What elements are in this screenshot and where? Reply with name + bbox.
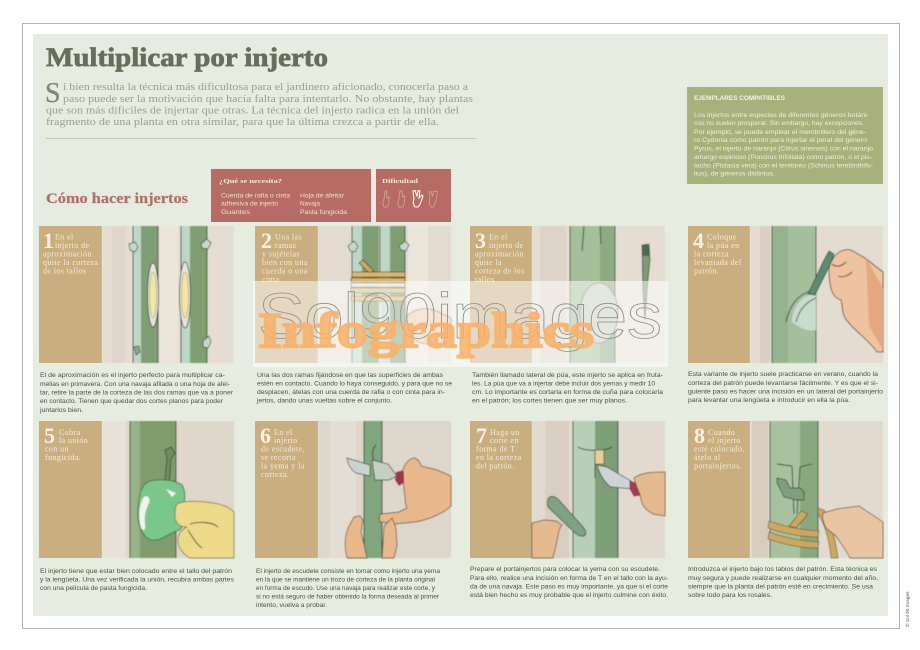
- description 3: en el patrón; los cortes tienen que ser muy planos.: [472, 398, 627, 404]
- caption 4: Coloque: [707, 232, 737, 242]
- caption 8: esté colocado,: [694, 444, 745, 454]
- caption 8: portainjertos.: [694, 462, 742, 470]
- caption 4: la corteza: [694, 250, 729, 258]
- description 2: desplacen, átelas con una cuerda de rafia o con cinta para in-: [257, 389, 445, 396]
- panel: difficulty: Dificultad: [382, 178, 418, 185]
- illustration 5: fungicide on graft: [102, 421, 234, 558]
- intro text block: que son más difíciles de injertar que otras. La técnica del injerto radica en la unión del: [46, 106, 459, 116]
- caption 8: [694, 423, 745, 470]
- title: Multiplicar por injerto: [46, 43, 328, 72]
- step 4 panel: [688, 226, 884, 404]
- panel: compatible specimens: [687, 87, 883, 184]
- credit: © Sol 90 Images: [904, 591, 911, 627]
- description 3: [472, 372, 664, 404]
- step 1 panel: [39, 226, 234, 414]
- intro text block: fragmento de una planta en otra similar, para que la última crezca a partir de ella.: [46, 117, 439, 128]
- description 6: en la que se mantiene un trozo de corteza de la planta original: [256, 576, 435, 584]
- panel: materials needed: [211, 169, 371, 222]
- description 8: Introduzca el injerto bajo los labios del patrón. Esta técnica es: [688, 566, 877, 573]
- caption 6: la yema y la: [261, 462, 305, 470]
- caption 6: injerto: [274, 436, 298, 445]
- description 3: cm. Lo importante es cortarla en forma de cuña para colocarla: [472, 389, 664, 396]
- panel: materials needed: adhesiva de injerto: [221, 200, 279, 208]
- caption 2: Una las: [275, 232, 302, 242]
- caption 3: [475, 228, 525, 284]
- caption 5: Cubra: [59, 428, 81, 437]
- watermark: orange text: Infographics: [258, 302, 594, 358]
- description 8: muy segura y puede realizarse en cualquier momento del año,: [688, 575, 878, 582]
- caption 7: forma de T: [476, 444, 515, 454]
- caption 8: el injerto: [708, 436, 741, 445]
- step 5 panel: [39, 421, 234, 592]
- caption 1: quite la corteza: [43, 258, 98, 267]
- panel: materials needed: ¿Qué se necesita?: [219, 178, 282, 185]
- description 6: [256, 568, 441, 609]
- description 2: [256, 372, 453, 404]
- watermark band: [253, 280, 668, 367]
- caption 8: 8: [694, 423, 705, 448]
- description 6: intento, vuelva a probar.: [256, 602, 327, 609]
- description 4: Esta variante de injerto suele practicarse en verano, cuando la: [688, 371, 879, 378]
- caption 5: [44, 423, 88, 462]
- panel: materials needed: Cuerda de rafia o cinta: [221, 192, 291, 200]
- caption 4: 4: [693, 228, 704, 253]
- description 1: melias en primavera. Con una navaja afilada o una hoja de afei-: [40, 381, 230, 388]
- description 2: Una las dos ramas fijándose en que las superficies de ambas: [257, 372, 443, 379]
- caption 4: patrón.: [694, 266, 719, 276]
- description 1: El de aproximación es el injerto perfecto para multiplicar ca-: [40, 372, 225, 379]
- caption 4: la púa en: [707, 241, 739, 250]
- caption 7: [476, 423, 522, 470]
- panel: materials needed: Hoja de afeitar: [300, 192, 344, 200]
- description 7: [470, 566, 669, 599]
- description 7: Para ello, realice una incisión en forma de T en el tallo con la ayu-: [470, 575, 668, 582]
- panel: difficulty: [376, 169, 451, 222]
- caption 2: [261, 228, 308, 284]
- illustration 6: cutting the bud: [318, 421, 451, 558]
- description 2: estén en contacto. Cuando lo haya conseguido, y para que no se: [257, 380, 453, 388]
- caption 1: de los tallos: [43, 266, 86, 276]
- caption 1: 1: [43, 228, 54, 253]
- description 1: en contacto. Tienen que quedar dos cortes planos para poder: [40, 398, 223, 405]
- caption 1: injerto de: [55, 241, 89, 250]
- panel: compatible specimens: Los injertos entre especies de diferentes géneros botáni-: [694, 112, 869, 119]
- caption 7: en la corteza: [476, 453, 522, 462]
- description 8: [688, 566, 878, 599]
- description 5: con una película de pasta fungicida.: [40, 585, 147, 592]
- caption 2: cinta: [262, 275, 280, 284]
- caption 5: fungicida.: [45, 453, 81, 462]
- caption 6: de escudete,: [261, 444, 305, 454]
- description 6: en forma de escudo. Use una navaja para realizar este corte, y: [256, 585, 436, 592]
- caption 2: y sujételas: [262, 250, 300, 258]
- caption 6: En el: [274, 428, 293, 437]
- panel: compatible specimens: cos no suelen prosperar. Sin embargo, hay excepciones.: [694, 120, 864, 127]
- caption 1: [43, 228, 98, 276]
- caption 1: En el: [55, 232, 74, 242]
- caption 8: Cuando: [708, 428, 735, 437]
- caption 4: levantada del: [694, 258, 742, 267]
- illustration 8: tying the graft: [750, 421, 883, 558]
- caption 3: quite la: [475, 258, 502, 267]
- intro text block: [45, 78, 473, 128]
- intro text block: i bien resulta la técnica más dificultosa para el jardinero aficionado, conocerla paso a: [63, 82, 468, 93]
- illustration 3: stem and scion: [532, 226, 665, 363]
- caption 7: 7: [476, 423, 487, 448]
- caption 3: 3: [475, 228, 486, 253]
- caption 6: 6: [260, 423, 271, 448]
- caption 3: tallos: [475, 275, 495, 284]
- step 8 panel: [688, 421, 883, 599]
- caption 5: la unión: [59, 436, 88, 445]
- step 6 panel: [255, 421, 451, 609]
- caption 3: corteza de los: [475, 266, 525, 276]
- description 2: jertos, dando unas vueltas sobre el conjunto.: [256, 398, 392, 404]
- caption 6: corteza.: [261, 470, 289, 479]
- caption 7: Haga un: [490, 428, 520, 437]
- caption 4: [693, 228, 742, 276]
- panel: compatible specimens: Por ejemplo, se puede emplear el membrillero del géne-: [694, 129, 866, 136]
- description 4: para levantar una lengüeta e introducir en ella la púa.: [688, 397, 850, 404]
- caption 7: corte en: [490, 436, 519, 445]
- description 3: También llamado lateral de púa, este injerto se aplica en fruta-: [472, 372, 663, 379]
- panel: materials needed: Pasta fungicida: [300, 209, 348, 216]
- description 8: siempre que la planta del patrón esté en crecimiento. Se usa: [688, 584, 874, 590]
- description 5: [40, 568, 234, 592]
- watermark: outline text: Sol90images: [258, 280, 662, 352]
- description 6: El injerto de escudete consiste en tomar como injerto una yema: [256, 568, 441, 575]
- caption 1: aproximación: [43, 250, 92, 258]
- panel: materials needed: Navaja: [300, 200, 321, 208]
- section heading: Cómo hacer injertos: [46, 191, 188, 207]
- illustration 7: T-shaped cut: [532, 421, 665, 558]
- caption 2: cuerda o una: [262, 266, 308, 276]
- illustration 1: two cut stems: [102, 226, 234, 363]
- description 7: da de una navaja. Este paso es muy importante, ya que si el corte: [470, 584, 669, 590]
- panel: compatible specimens: amargo espinoso (Poncirus trifoliata) como patrón, o el pis-: [694, 154, 872, 161]
- intro text block: S: [45, 78, 61, 109]
- caption 7: del patrón.: [476, 462, 515, 470]
- step 3 panel: [470, 226, 665, 404]
- description 7: Prepare el portainjertos para colocar la yema con su escudete.: [470, 566, 660, 573]
- caption 6: [260, 423, 305, 479]
- caption 5: con un: [45, 444, 69, 454]
- description 4: guiente paso es hacer una incisión en un lateral del portainjerto: [688, 388, 884, 396]
- description 6: si no está seguro de haber obtenido la forma deseada al primer: [256, 594, 439, 600]
- description 1: tar, retire la parte de la corteza de las dos ramas que va a poner: [40, 390, 233, 396]
- description 1: [39, 372, 233, 414]
- caption 3: aproximación: [475, 250, 524, 258]
- description 4: corteza del patrón puede levantarse fácilmente. Y es que el si-: [688, 380, 878, 387]
- description 5: y la lengüeta. Una vez verificada la unión, recubra ambas partes: [40, 576, 234, 584]
- caption 3: injerto de: [489, 241, 523, 250]
- panel: materials needed: Guantes: [221, 209, 250, 216]
- panel: compatible specimens: Pyrus, el injerto de naranjo (Citrus sinensis) con el naranjo: [694, 146, 874, 152]
- intro text block: paso puede ser la motivación que hacía falta para intentarlo. No obstante, hay plantas: [63, 94, 473, 105]
- caption 2: 2: [261, 228, 272, 253]
- description 1: juntarlos bien.: [39, 407, 83, 414]
- panel: compatible specimens: ro Cydonia como patrón para injertar el peral del género: [694, 137, 868, 144]
- panel: compatible specimens: tacho (Pistacia vera) con el terebinto (Schinus terebinthifo-: [694, 162, 873, 170]
- icon: difficulty hands: [383, 190, 438, 207]
- description 5: El injerto tiene que estar bien colocado entre el tallo del patrón: [40, 568, 232, 575]
- caption 2: bien con una: [262, 258, 308, 267]
- description 8: sobre todo para los rosales.: [688, 592, 772, 599]
- caption 8: átelo al: [694, 453, 721, 462]
- caption 6: se recorta: [261, 453, 296, 462]
- description 3: les. La púa que va a injertar debe incluir dos yemas y medir 10: [472, 380, 656, 388]
- caption 3: En el: [489, 232, 508, 242]
- description 7: está bien hecho es muy probable que el injerto culmine con éxito.: [470, 592, 668, 599]
- step 7 panel: [470, 421, 669, 599]
- illustration 2: tied stems: [318, 226, 451, 363]
- caption 5: 5: [44, 423, 55, 448]
- description 4: [688, 371, 884, 404]
- caption 2: ramas: [275, 241, 296, 250]
- step 2 panel: [255, 226, 453, 404]
- panel: compatible specimens: lius), de géneros distintos.: [694, 170, 775, 178]
- panel: compatible specimens: EJEMPLARES COMPATIBLES: [694, 95, 785, 102]
- illustration 4: scion and hand: [750, 226, 883, 363]
